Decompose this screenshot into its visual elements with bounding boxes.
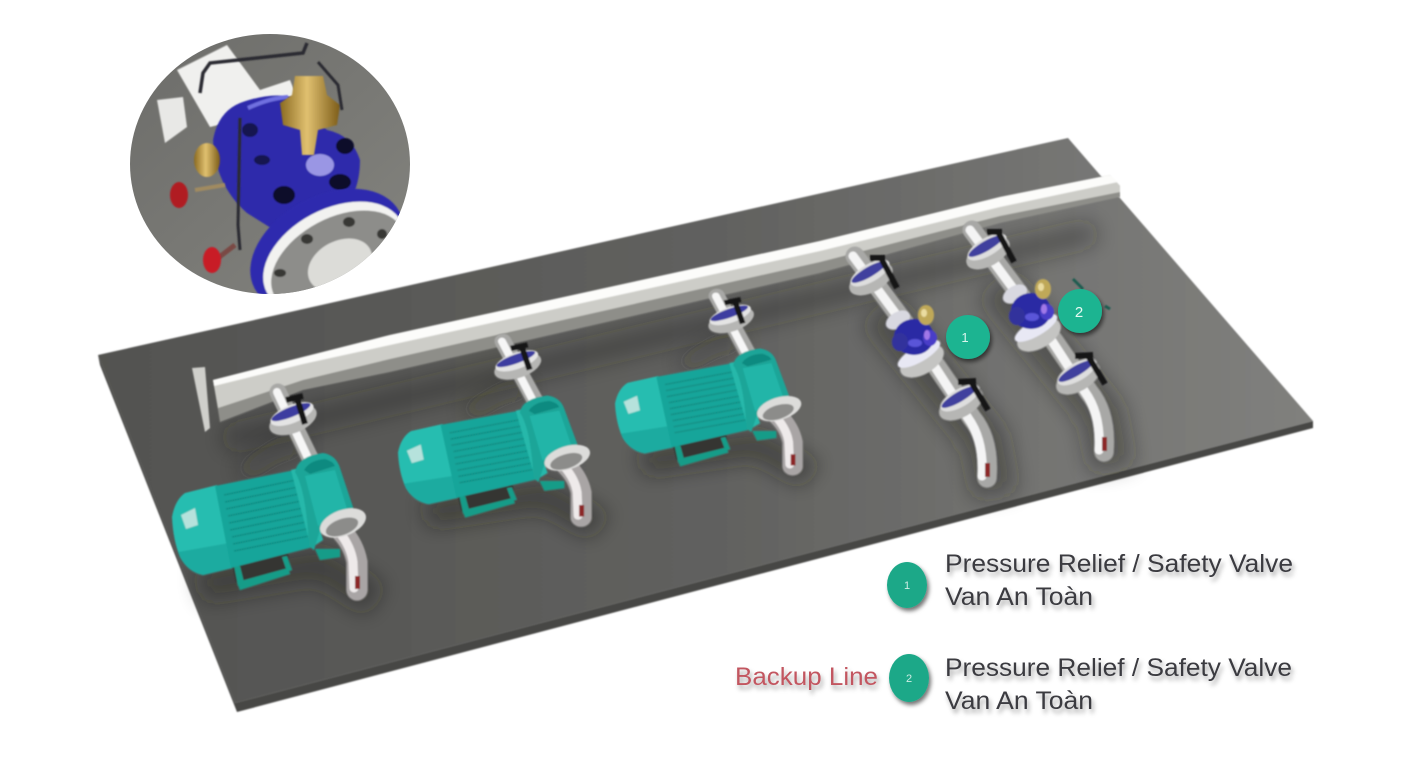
legend item 1: Van An Toàn [945,583,1093,611]
pump 2 [398,341,599,526]
red handles [170,182,221,273]
backup line label: Backup Line [735,663,878,691]
small white flange [157,97,187,143]
brass pilot [194,76,340,177]
pump 3 [615,296,810,475]
control tubing [195,43,342,258]
badge 2 on diagram [1058,289,1102,333]
legend item 2: Pressure Relief / Safety Valve [945,654,1292,682]
legend item 2: Van An Toàn [945,687,1093,715]
main header pipe [192,175,1120,440]
badge 1 on diagram: 1 [961,330,969,345]
badge 2 on diagram: 2 [1075,304,1083,321]
legend item 1 [887,550,1293,611]
legend item 1: Pressure Relief / Safety Valve [945,550,1293,578]
pump 1 [172,392,375,600]
marker ticks behind badge 2 [1073,279,1110,309]
valve line 2 (backup) [961,228,1112,469]
blue valve body [213,95,360,240]
legend item 1: 1 [904,580,910,592]
valve line 1 [844,254,995,495]
lower flange and outlet [249,188,400,294]
legend item 2 [889,654,1292,715]
white pipe [177,45,300,127]
badge 1 on diagram [946,315,990,359]
base plate [98,138,1313,712]
inset: valve close-up [130,34,410,294]
legend item 2: 2 [906,673,912,685]
